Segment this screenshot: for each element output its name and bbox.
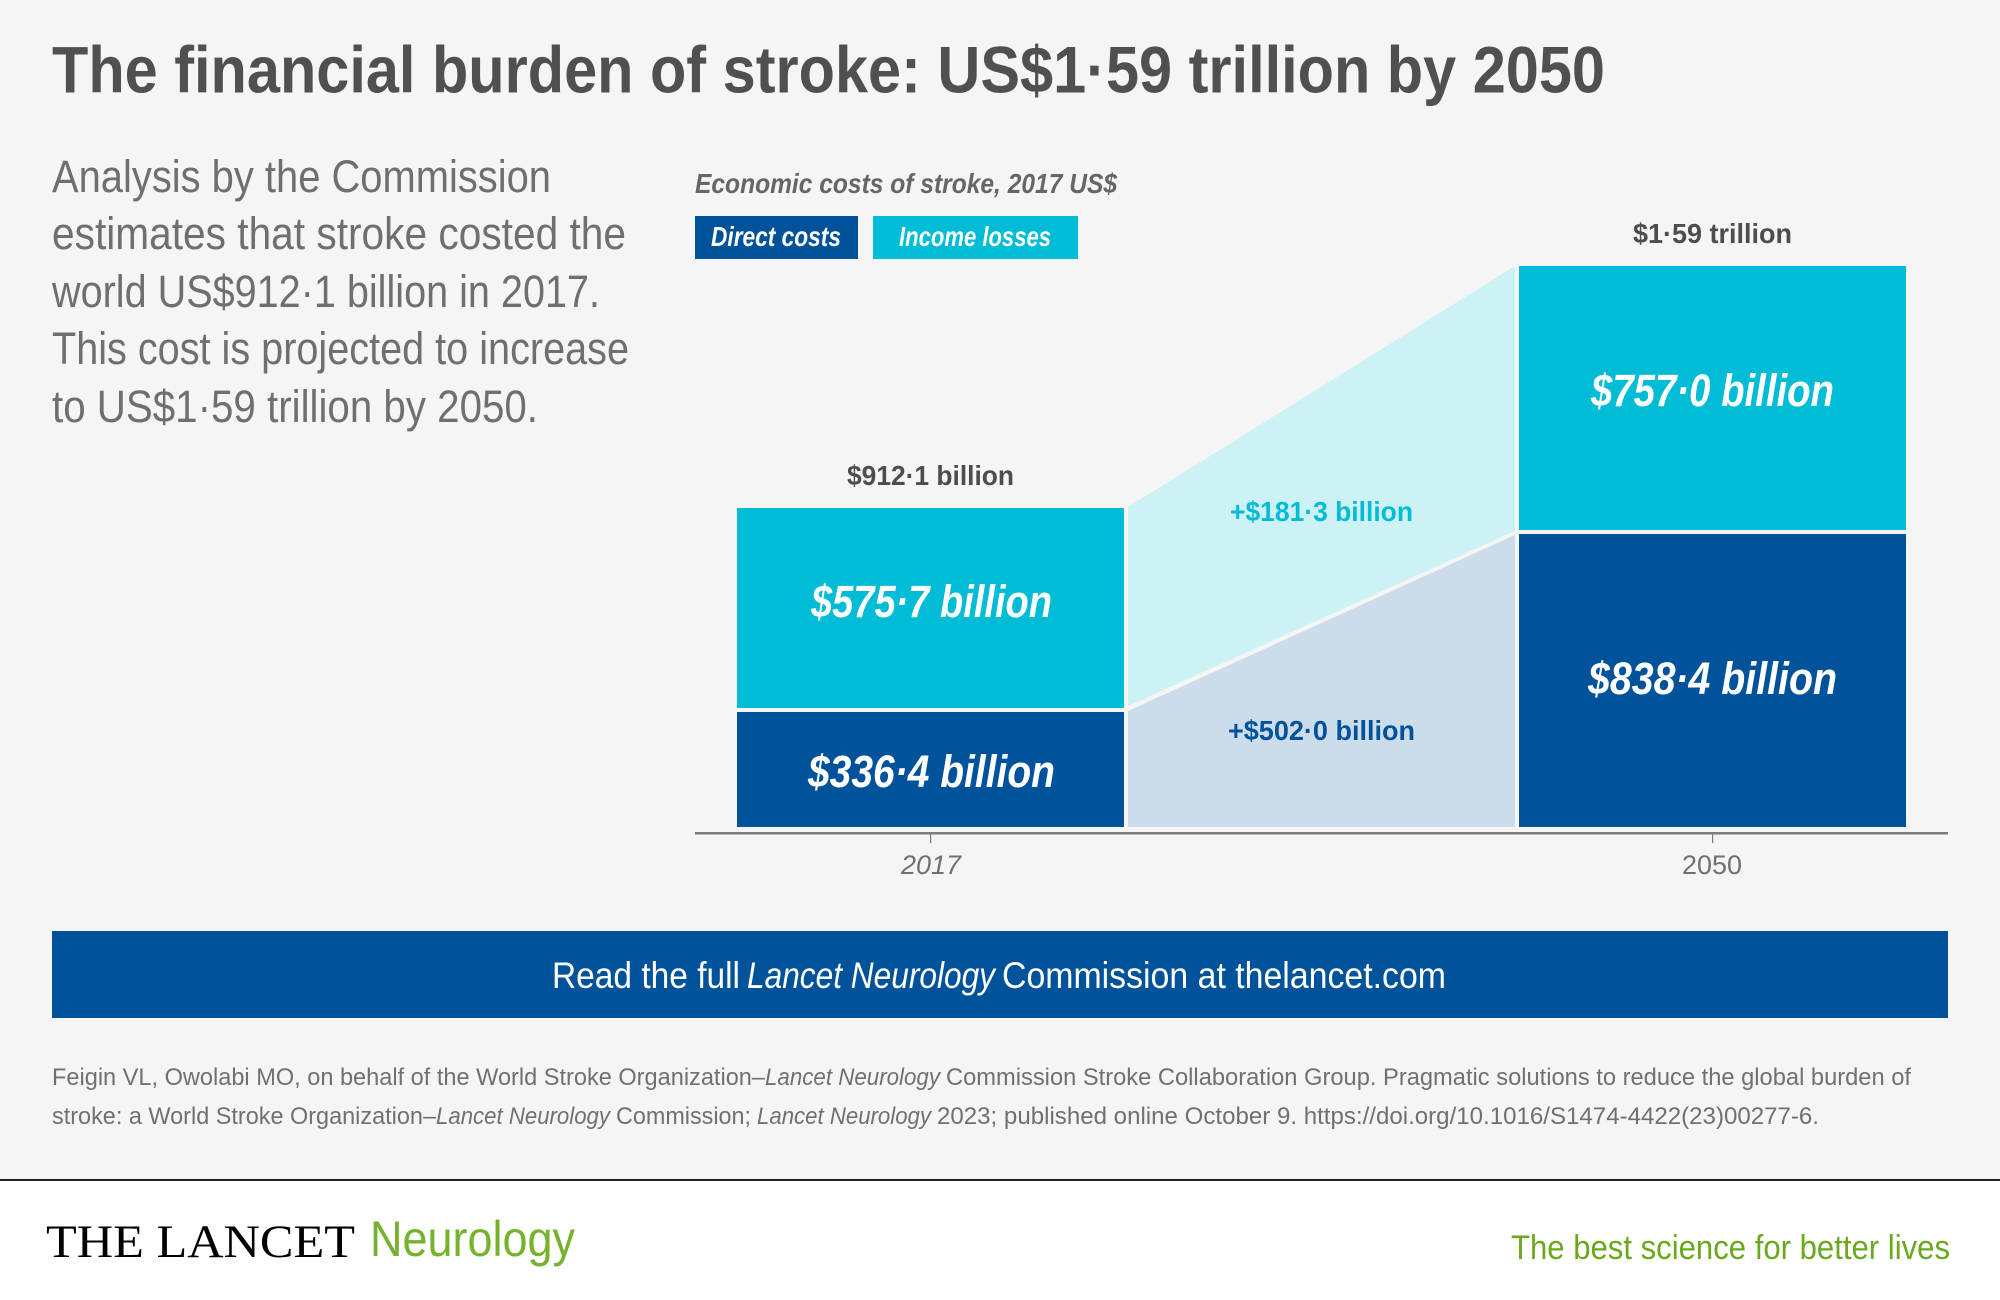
- increase wedge: income losses: +$181·3 billion: [1230, 496, 1413, 527]
- total label 2050: $1·59 trillion: [1633, 218, 1792, 249]
- legend: direct costs: Direct costs: [711, 221, 841, 252]
- journal logo: [46, 1211, 575, 1268]
- increase wedge: income losses: [1128, 266, 1515, 706]
- increase wedge: direct costs: [1128, 535, 1515, 827]
- call to action banner: Lancet Neurology: [747, 955, 997, 996]
- citation: Commission Stroke Collaboration Group. Pragmatic solutions to reduce the global burden of: [946, 1064, 1911, 1091]
- intro paragraph: Analysis by the Commission: [52, 151, 551, 202]
- journal logo: Neurology: [370, 1211, 575, 1267]
- bar 2017: income losses: [737, 508, 1124, 708]
- citation: Lancet Neurology: [757, 1103, 933, 1130]
- intro paragraph: world US$912·1 billion in 2017.: [51, 266, 600, 317]
- legend: direct costs: [695, 216, 858, 259]
- footer: [0, 1179, 2000, 1300]
- total label 2017: $912·1 billion: [847, 460, 1014, 491]
- legend: income losses: Income losses: [899, 221, 1051, 252]
- citation: stroke: a World Stroke Organization–: [52, 1103, 437, 1130]
- bar 2050: direct costs: [1519, 534, 1906, 827]
- citation: Lancet Neurology: [436, 1103, 612, 1130]
- title: The financial burden of stroke: US$1·59 trillion by 2050: [52, 32, 1605, 106]
- citation: Feigin VL, Owolabi MO, on behalf of the World Stroke Organization–: [52, 1064, 766, 1091]
- legend: income losses: [873, 216, 1078, 259]
- call to action banner: [52, 931, 1948, 1018]
- bar 2050: income losses: [1519, 266, 1906, 530]
- citation: 2023; published online October 9. https://doi.org/10.1016/S1474-4422(23)00277-6.: [937, 1103, 1819, 1130]
- call to action banner: Commission at thelancet.com: [1002, 955, 1446, 996]
- x axis: [695, 832, 1948, 880]
- intro paragraph: to US$1·59 trillion by 2050.: [52, 381, 538, 432]
- intro paragraph: [51, 151, 629, 432]
- bar 2017: direct costs: $336·4 billion: [807, 746, 1055, 797]
- legend: [695, 216, 1078, 259]
- stacked bar chart: [695, 218, 1948, 880]
- chart heading: Economic costs of stroke, 2017 US$: [695, 168, 1117, 199]
- citation: Commission;: [616, 1103, 751, 1130]
- x axis: 2050: [1682, 850, 1742, 880]
- bar 2050: income losses: $757·0 billion: [1590, 365, 1834, 416]
- bar 2017: direct costs: [737, 712, 1124, 827]
- x axis: 2017: [900, 850, 962, 880]
- citation: [52, 1064, 1911, 1130]
- intro paragraph: estimates that stroke costed the: [52, 208, 626, 259]
- bar 2050: direct costs: $838·4 billion: [1587, 653, 1837, 704]
- journal logo: THE LANCET: [46, 1216, 355, 1268]
- intro paragraph: This cost is projected to increase: [52, 323, 629, 374]
- bar 2017: income losses: $575·7 billion: [810, 576, 1052, 627]
- call to action banner: Read the full: [552, 955, 740, 996]
- citation: Lancet Neurology: [765, 1064, 942, 1091]
- tagline: The best science for better lives: [1511, 1229, 1950, 1267]
- increase wedge: direct costs: +$502·0 billion: [1228, 715, 1415, 746]
